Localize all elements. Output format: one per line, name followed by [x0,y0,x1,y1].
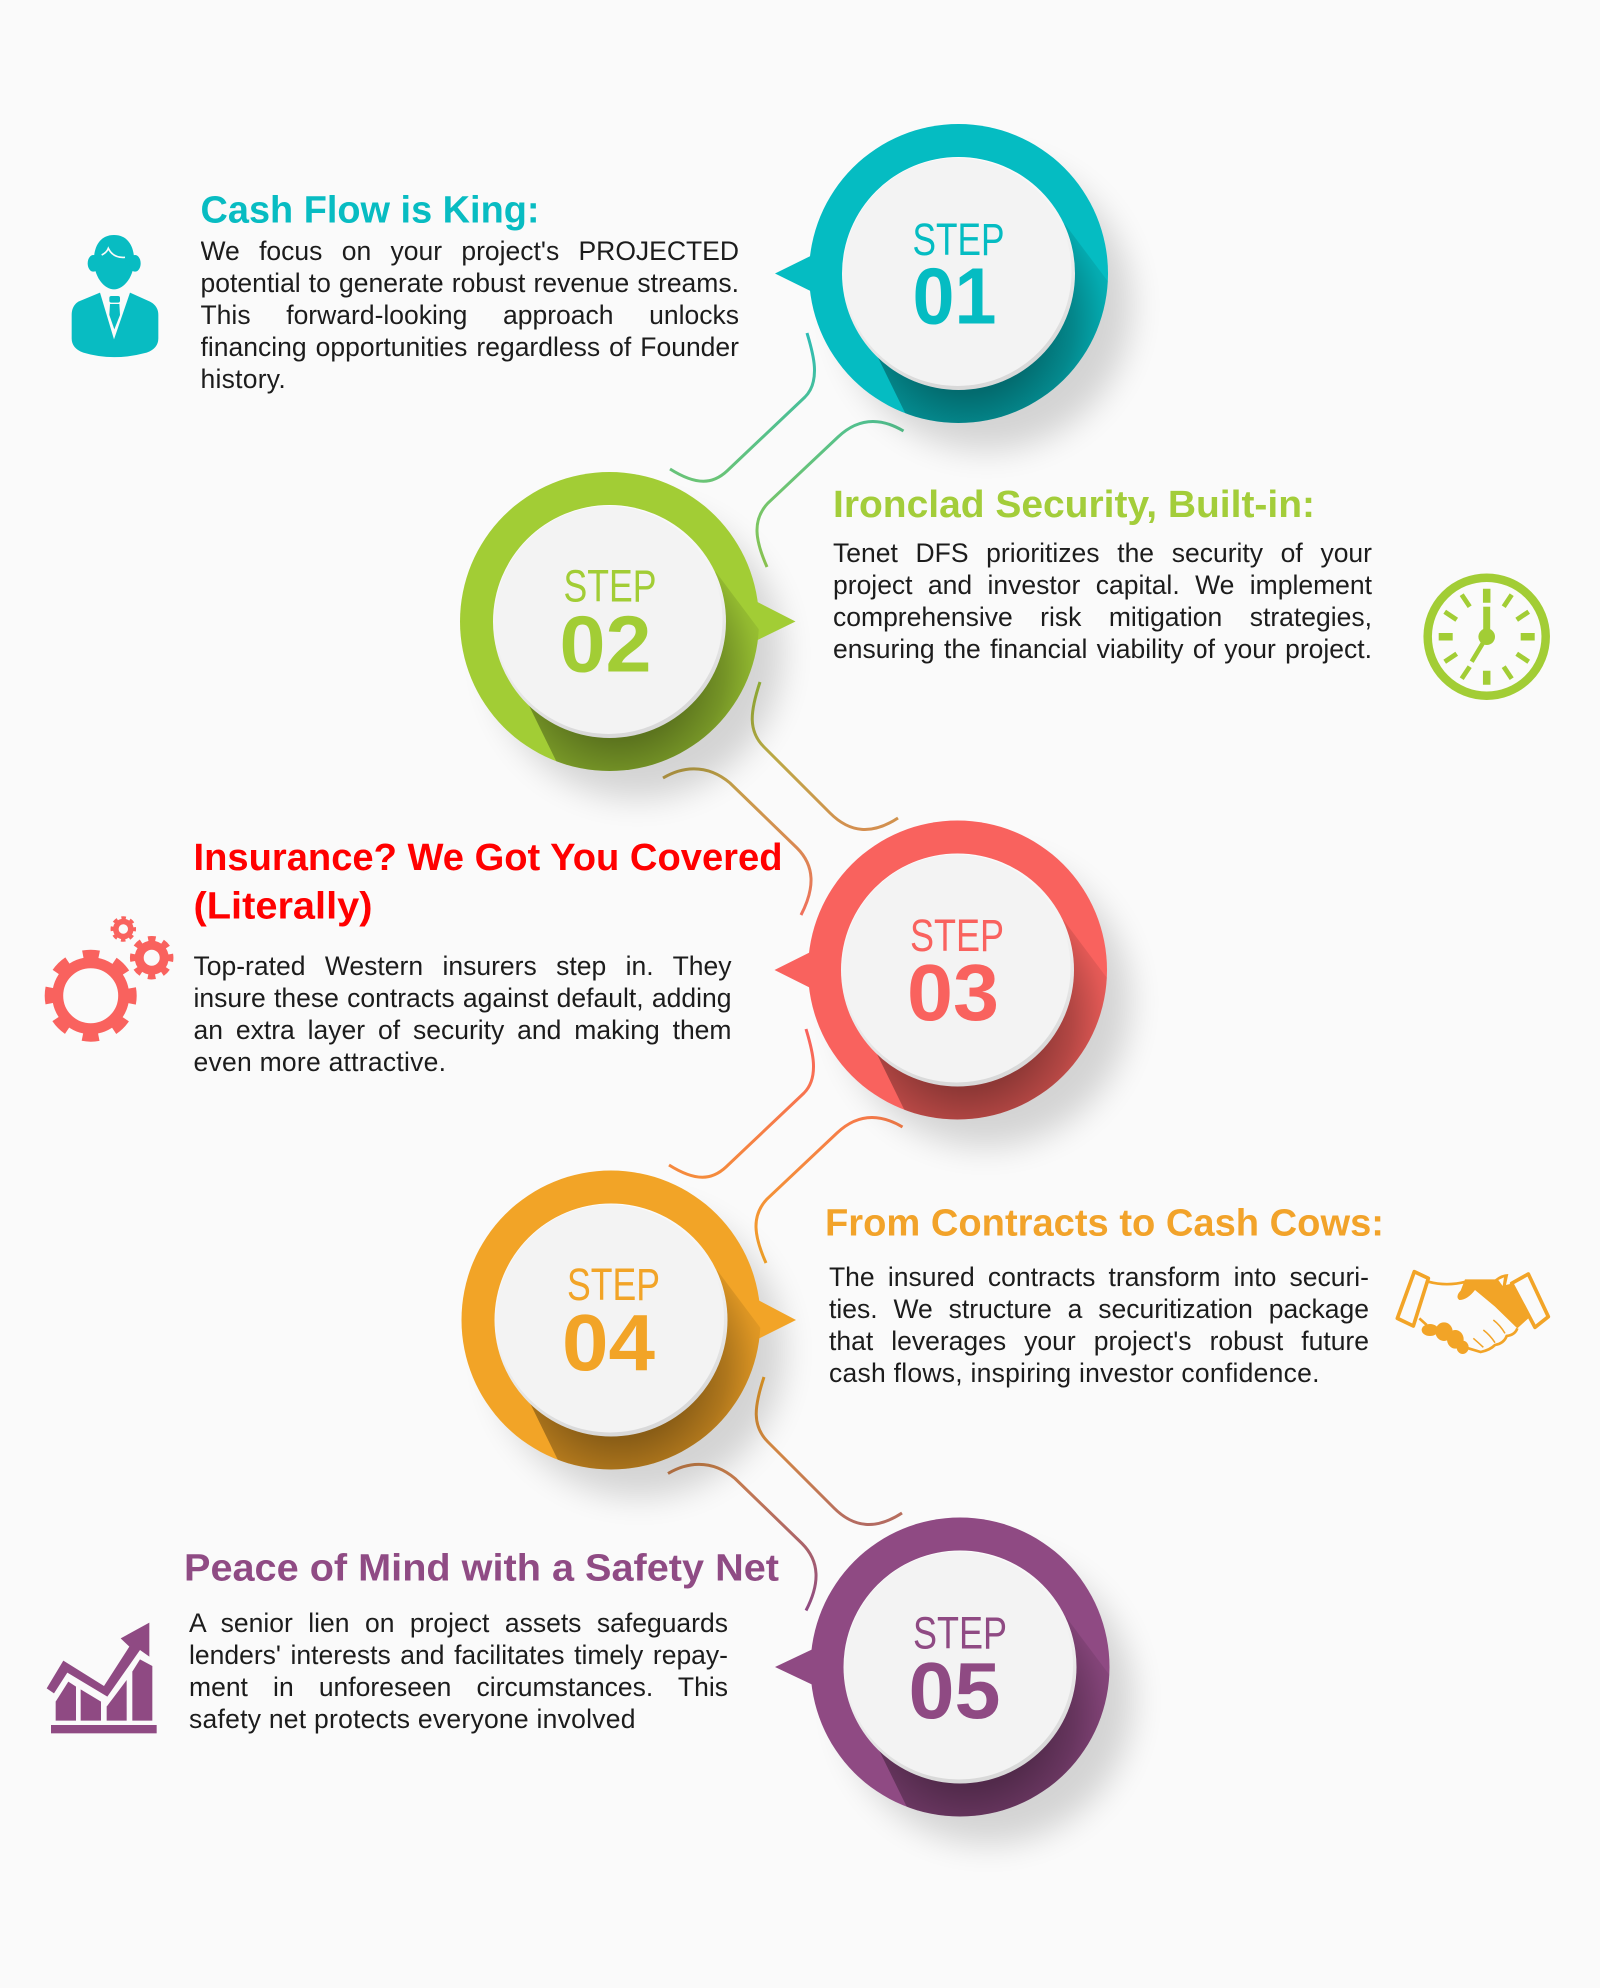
text block: step 1 description [200,235,739,397]
text block: step 5 description: lenders' interests and facilitates timely repay- [189,1640,728,1670]
text block: step 4 description: cash flows, inspiring investor confidence. [829,1358,1320,1388]
text block: step 1 description: This forward-looking approach unlocks [200,300,739,330]
heading: Peace of Mind with a Safety Net: Peace of Mind with a Safety Net [184,1548,779,1590]
heading: Ironclad Security: Ironclad Security, Built-in: [833,484,1315,526]
connector: step 3 to step 4, right [756,1117,902,1263]
heading: Cash Flow is King: Cash Flow is King: [200,190,540,232]
connector: step 1 to step 2, left [670,333,815,481]
heading: Insurance [194,837,782,928]
connector: step 4 to step 5, right [756,1377,902,1524]
text block: step 2 description: comprehensive risk mitigation strategies, [833,602,1372,632]
badge: step 4 [462,1170,796,1508]
connector: step 1 to step 2, right [757,421,904,567]
text block: step 4 description [829,1261,1369,1391]
text block: step 2 description: ensuring the financial viability of your project. [833,634,1372,664]
label: STEP: STEP [912,214,1004,265]
connector: step 2 to step 3, left [663,769,811,915]
badge: step 5 [775,1518,1144,1855]
panel: step 4 text [825,1202,1384,1391]
text block: step 3 description [194,950,732,1080]
badge: step 3 [774,820,1142,1158]
text block: step 5 description: ment in unforeseen circumstances. This [189,1672,728,1702]
number: 03: 03 [907,948,999,1037]
connector: step 2 to step 3, right [752,682,898,829]
icon: clock [1428,578,1546,696]
icon: gears [50,918,171,1037]
text block: step 5 description: A senior lien on project assets safeguards [189,1608,728,1638]
number: 04: 04 [562,1298,656,1387]
number: 05: 05 [908,1646,1000,1735]
text block: step 1 description: potential to generate robust revenue streams. [200,268,739,298]
text block: step 5 description: safety net protects everyone involved [189,1704,636,1734]
badge: step 1 [775,124,1142,462]
badge: step 2 [460,472,796,810]
connector: step 3 to step 4, left [669,1029,814,1177]
heading: Insurance: Insurance? We Got You Covered [194,837,782,879]
text block: step 2 description: Tenet DFS prioritizes the security of your [833,538,1372,568]
number: 01: 01 [912,252,996,340]
label: STEP: STEP [910,910,1004,961]
label: STEP: STEP [913,1608,1007,1658]
text block: step 1 description: history. [200,364,286,394]
label: STEP: STEP [564,560,656,612]
text block: step 2 description [833,537,1372,667]
text block: step 4 description: The insured contracts transform into securi- [829,1262,1369,1292]
text block: step 4 description: that leverages your project's robust future [829,1326,1369,1356]
text block: step 2 description: project and investor capital. We implement [833,570,1372,600]
icon: growth chart [47,1623,157,1733]
text block: step 3 description: Top-rated Western insurers step in. They [194,951,732,981]
text block: step 3 description: an extra layer of security and making them [194,1015,732,1045]
heading: Insurance: (Literally) [194,886,372,928]
connector: step 4 to step 5, left [668,1464,816,1610]
panel: step 1 text [200,190,739,397]
text block: step 1 description: We focus on your project's PROJECTED [200,236,739,266]
panel: step 5 text [184,1548,779,1737]
label: STEP: STEP [567,1259,660,1310]
icon: businessman [72,235,158,357]
panel: step 3 text [194,837,782,1080]
icon: handshake [1397,1272,1548,1354]
text block: step 3 description: insure these contracts against default, adding [194,983,732,1013]
heading: From Contracts to Cash Cows: From Contracts to Cash Cows: [825,1202,1384,1244]
text block: step 5 description [189,1607,728,1737]
number: 02: 02 [560,600,652,688]
text block: step 3 description: even more attractive. [194,1047,446,1077]
text block: step 4 description: ties. We structure a securitization package [829,1294,1369,1324]
text block: step 1 description: financing opportunities regardless of Founder [200,332,739,362]
panel: step 2 text [833,484,1372,667]
